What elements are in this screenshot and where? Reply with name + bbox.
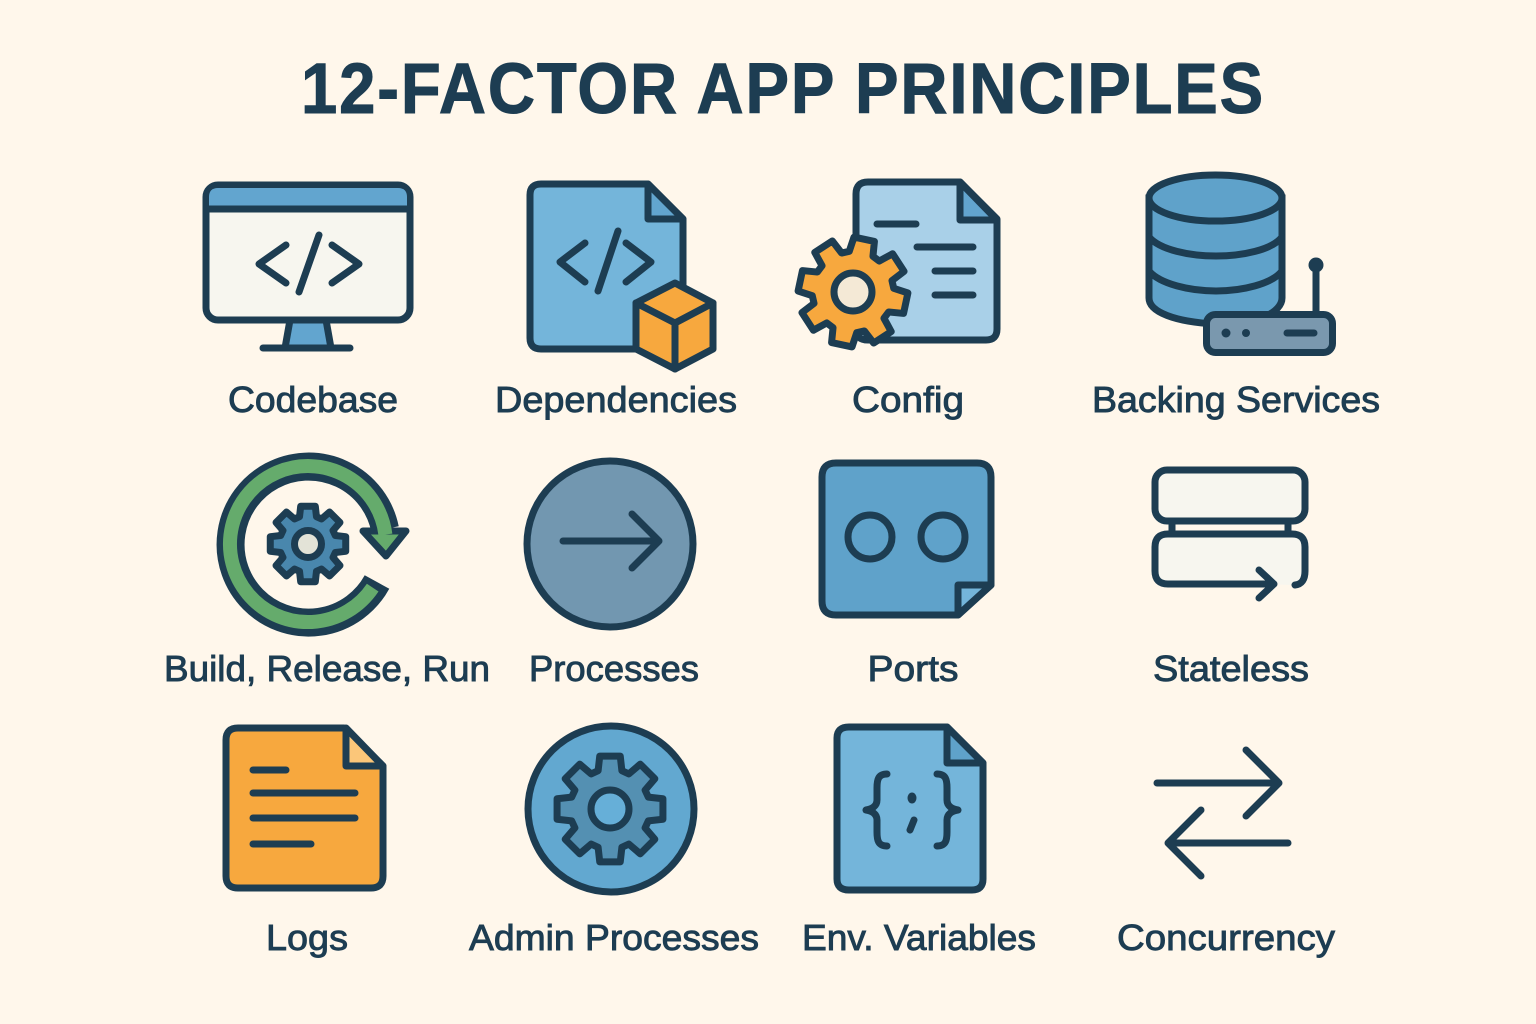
icon: environment variables file xyxy=(837,727,983,890)
label: admin processes: Admin Processes xyxy=(469,917,759,958)
icon: stateless stacked boxes xyxy=(1155,470,1305,598)
icon: concurrency arrows xyxy=(1157,750,1288,876)
label: backing services: Backing Services xyxy=(1092,379,1380,420)
icon: build release run cycle xyxy=(230,466,406,623)
icon: codebase monitor xyxy=(206,185,410,348)
label: config: Config xyxy=(852,379,964,420)
label: concurrency: Concurrency xyxy=(1117,917,1335,958)
label: codebase: Codebase xyxy=(228,379,398,420)
icon: dependencies file and box xyxy=(530,184,713,369)
label: build release run: Build, Release, Run xyxy=(164,648,490,689)
icon: ports square xyxy=(822,463,991,615)
label: ports: Ports xyxy=(868,648,958,689)
icon: admin processes gear circle xyxy=(528,726,694,892)
label: env variables: Env. Variables xyxy=(802,917,1036,958)
icon: logs document xyxy=(226,728,383,888)
icon: processes arrow circle xyxy=(527,461,693,627)
label: processes: Processes xyxy=(529,648,699,689)
label: stateless: Stateless xyxy=(1153,648,1309,689)
icon: config file and gear xyxy=(789,182,997,356)
icon: backing services database and router xyxy=(1149,175,1332,352)
title: 12-FACTOR APP PRINCIPLES xyxy=(301,50,1265,129)
label: dependencies: Dependencies xyxy=(495,379,737,420)
label: logs: Logs xyxy=(266,917,348,958)
